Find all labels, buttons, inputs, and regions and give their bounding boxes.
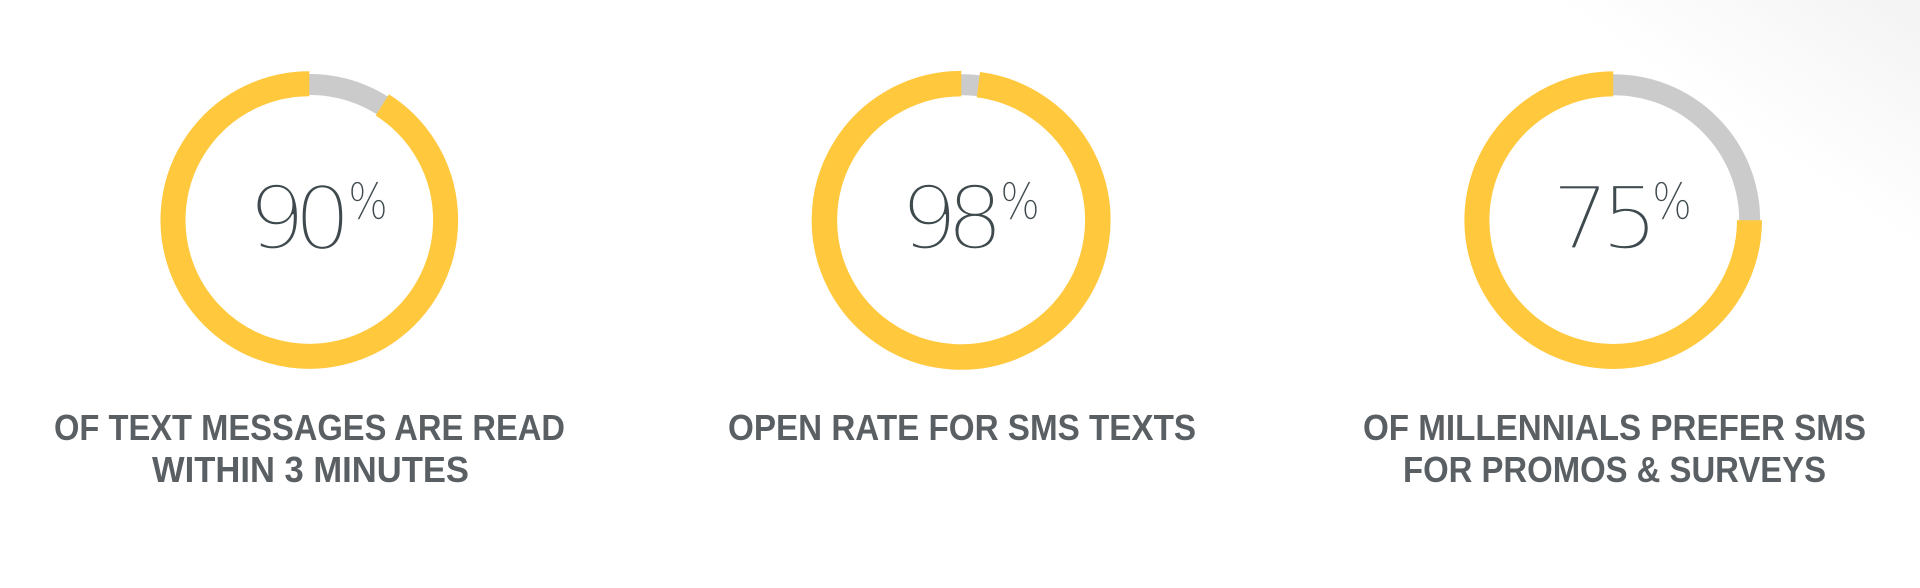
value: 98%: % (1000, 173, 1040, 231)
label: of millennials prefer SMS for promos and surveys: OF MILLENNIALS PREFER SMS (1363, 407, 1866, 448)
label: of text messages are read within 3 minutes: OF TEXT MESSAGES ARE READ (54, 407, 565, 448)
panel: 90 percent read within 3 minutes (54, 84, 565, 490)
donut chart: 90% (173, 84, 446, 356)
value: 98%: 98 (900, 168, 995, 268)
value: 90%: 90 (248, 168, 343, 268)
value: 75%: % (1652, 173, 1692, 231)
label: of millennials prefer SMS for promos and surveys: FOR PROMOS & SURVEYS (1403, 449, 1826, 490)
value: 90% (248, 168, 388, 268)
donut chart: 75% (1477, 84, 1750, 357)
value: 98% (900, 168, 1040, 268)
label: of millennials prefer SMS for promos and surveys (1363, 407, 1866, 490)
value: 90%: % (348, 173, 388, 231)
panel: 98 percent open rate (728, 84, 1196, 448)
panel: 75 percent of millennials prefer SMS (1363, 84, 1866, 490)
value: 75%: 75 (1552, 168, 1650, 268)
label: open rate for SMS texts: OPEN RATE FOR SMS TEXTS (728, 407, 1196, 448)
label: of text messages are read within 3 minutes (54, 407, 565, 490)
label: of text messages are read within 3 minutes: WITHIN 3 MINUTES (152, 449, 469, 490)
donut chart: 98% (824, 84, 1098, 357)
